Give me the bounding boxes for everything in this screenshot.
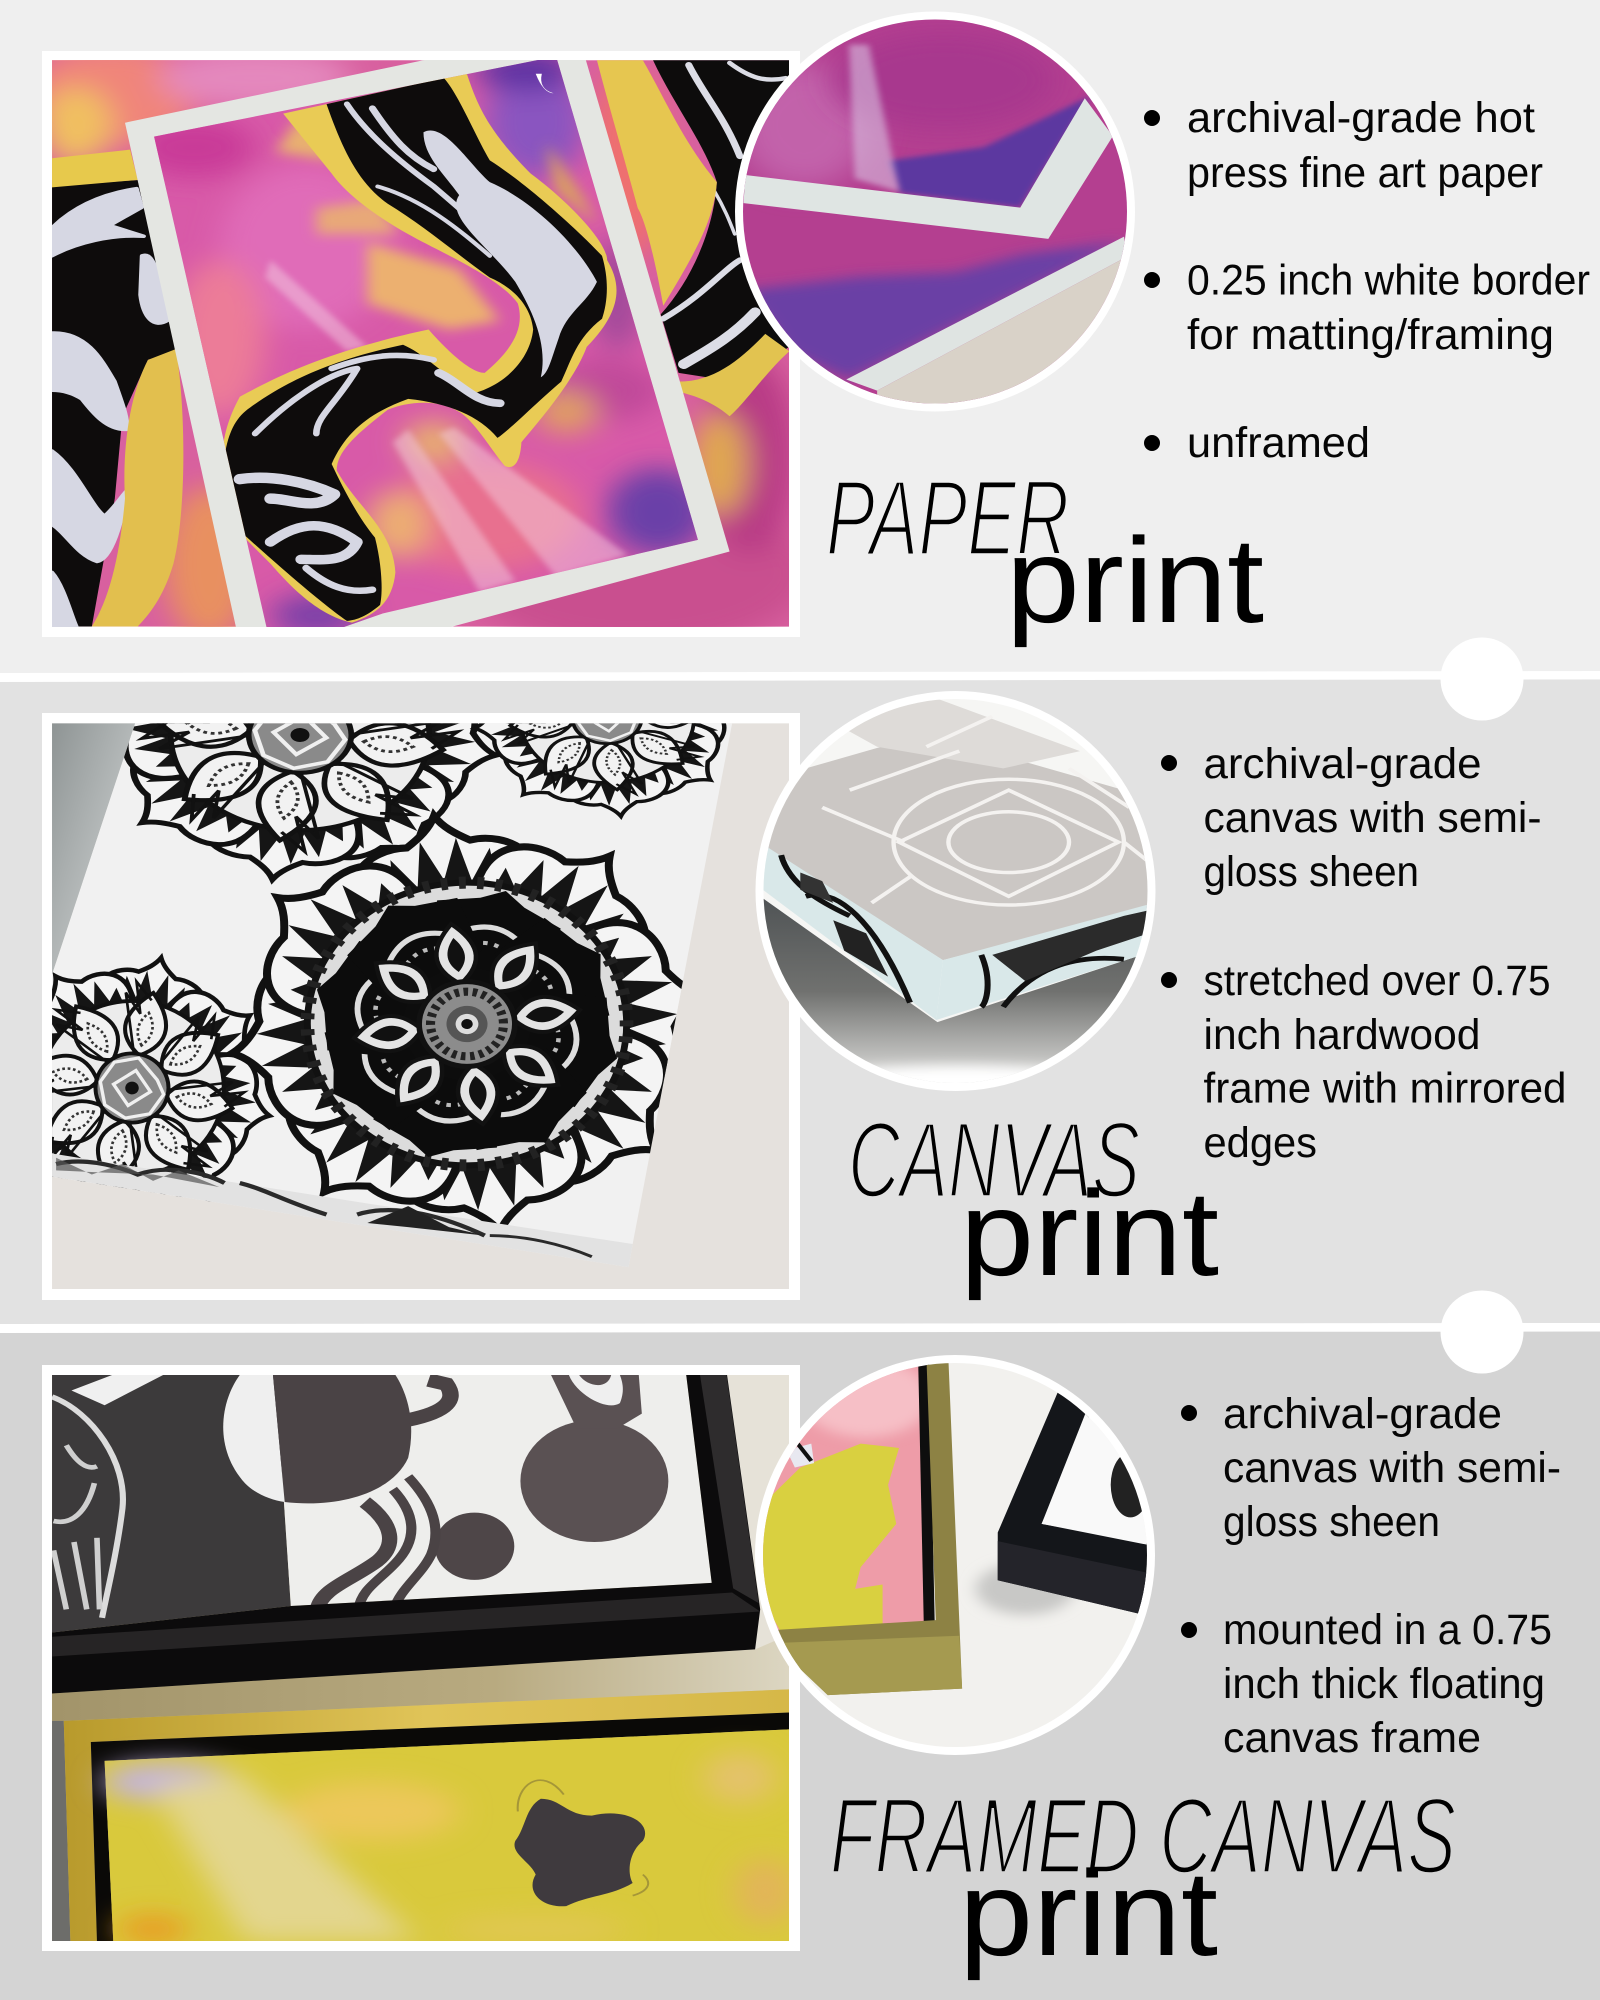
bullet list: canvas print features: canvas with semi- xyxy=(1204,794,1542,842)
bullet list: canvas print features: edges xyxy=(1204,1119,1317,1167)
bullet list: framed canvas print features: mounted in a 0.75 xyxy=(1223,1606,1552,1654)
print artwork xyxy=(154,60,698,627)
bullet list: paper print features: archival-grade hot xyxy=(1187,94,1535,142)
bullet list: canvas print features: frame with mirrored xyxy=(1204,1065,1566,1113)
panel: paper print xyxy=(0,0,1600,680)
photo frame: paper print on canvas xyxy=(26,28,811,650)
detail circle: frame corners closeup xyxy=(755,1355,1155,1755)
mandalas xyxy=(0,571,753,1261)
paper print sheet xyxy=(125,28,730,633)
bullet list: canvas print features: inch hardwood xyxy=(1204,1011,1480,1059)
gold river xyxy=(223,74,617,623)
black framed canvas xyxy=(52,1375,291,1633)
heading: paper: PAPER xyxy=(826,457,1069,578)
bullet list: paper print features: unframed xyxy=(1187,419,1370,467)
divider with circle: canvas to framed xyxy=(0,1290,1600,1374)
bullet list: canvas print features: stretched over 0.75 xyxy=(1204,957,1550,1005)
left marble area xyxy=(52,180,176,627)
bullet list: framed canvas print features: archival-grade xyxy=(1223,1390,1502,1438)
bullet list: canvas print features xyxy=(1161,740,1566,1167)
bullet list: framed canvas print features: canvas frame xyxy=(1223,1714,1481,1762)
photo frame: framed canvases xyxy=(42,1365,800,1951)
bullet list: framed canvas print features xyxy=(1181,1390,1561,1762)
detail circle: canvas corner closeup xyxy=(756,691,1156,1091)
divider with circle: paper to canvas xyxy=(0,638,1600,720)
detail circle: paper edge closeup xyxy=(735,12,1135,412)
heading: canvas: CANVAS xyxy=(848,1099,1140,1220)
black marble xyxy=(225,78,607,621)
panel background xyxy=(0,680,1600,1326)
right marble area xyxy=(653,60,789,382)
bullet list: canvas print features: gloss sheen xyxy=(1204,848,1419,896)
bullet list: canvas print features: archival-grade xyxy=(1204,740,1482,788)
bullet list: framed canvas print features: inch thick floating xyxy=(1223,1660,1545,1708)
gold framed canvas xyxy=(64,1689,789,1941)
panel: framed canvas print xyxy=(0,1326,1600,2000)
bullet list: paper print features: 0.25 inch white border xyxy=(1187,256,1590,304)
gold strips xyxy=(52,150,138,187)
photo frame: mandala canvas xyxy=(42,713,800,1300)
bullet list: paper print features xyxy=(1144,94,1590,467)
bullet list: paper print features: for matting/framing xyxy=(1187,311,1554,359)
heading: print: print xyxy=(1006,512,1264,648)
bullet list: paper print features: press fine art paper xyxy=(1187,149,1543,197)
canvas bottom edge xyxy=(52,1154,633,1267)
panel: canvas print xyxy=(0,680,1600,1324)
marble lavender streaks xyxy=(423,131,597,377)
heading: print: print xyxy=(959,1845,1218,1981)
panel background xyxy=(0,1326,1600,2000)
panel background xyxy=(0,0,1600,680)
bullet list: framed canvas print features: canvas with semi- xyxy=(1223,1444,1561,1492)
heading: print: print xyxy=(960,1165,1219,1301)
bullet list: framed canvas print features: gloss sheen xyxy=(1223,1498,1440,1546)
